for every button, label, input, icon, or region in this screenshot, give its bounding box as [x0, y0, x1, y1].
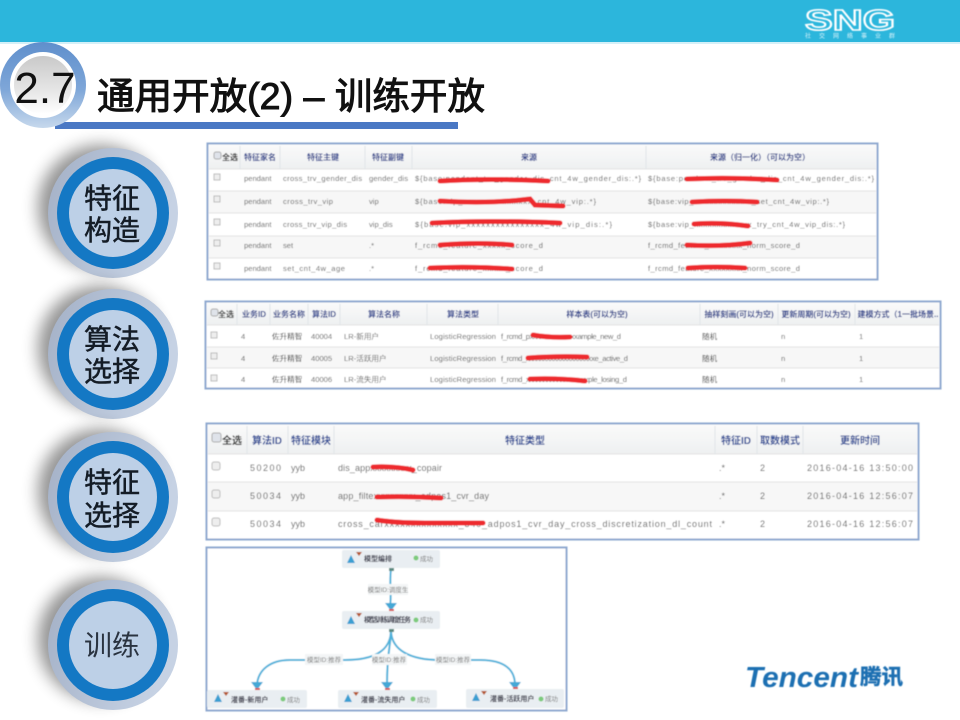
table: algorithm selection: 算法名称 — [368, 309, 400, 319]
title underline — [55, 122, 458, 129]
table: algorithm selection: 4 — [241, 375, 245, 384]
step: 特征构造 — [38, 145, 178, 278]
table: feature selection: 更新时间 — [840, 434, 880, 447]
table: algorithm selection: LR-活跃用户 — [344, 353, 387, 363]
table: algorithm selection: 业务ID — [242, 309, 266, 319]
table: algorithm selection: 佐升精智 — [272, 353, 302, 363]
table: feature construction: f_rcmd_feature_xxxxxxxx_norm_score_d — [648, 264, 800, 273]
table: algorithm selection: 佐升精智 — [272, 331, 302, 341]
step: 算法选择: 算法 — [84, 324, 140, 355]
node: active users: 成功 — [545, 694, 558, 703]
table: feature construction: .* — [369, 241, 374, 250]
table: algorithm selection: n — [781, 332, 785, 341]
logo: SNG: 社交网络事业群 — [805, 32, 895, 40]
table: algorithm selection: 40005 — [311, 354, 332, 363]
table: feature construction: 特征家名 — [244, 152, 276, 162]
table: algorithm selection: 抽样刻画(可以为空) — [704, 309, 774, 319]
table: algorithm selection: 更新周期(可以为空) — [781, 309, 851, 319]
step: 算法选择 — [38, 286, 178, 419]
table: feature construction: pendant — [244, 264, 272, 273]
table: feature selection: 特征类型 — [505, 434, 545, 447]
table: feature construction: pendant — [244, 174, 272, 183]
section number badge: 2.7 — [14, 64, 76, 113]
table: feature selection: app_filtexxxxxxxxx_adpos1_cvr_day — [338, 491, 490, 501]
table: feature construction: 来源（归一化）（可以为空） — [710, 152, 810, 162]
title: 通用开放(2) – 训练开放 — [97, 76, 485, 117]
node: lost users: 灌番-流失用户 — [361, 695, 405, 704]
table: feature selection: 2016-04-16 12:56:07 — [807, 491, 913, 501]
table: feature construction: set_cnt_4w_age — [283, 264, 345, 273]
table: feature selection: yyb — [291, 519, 305, 529]
table: feature selection: 50200 — [250, 463, 281, 473]
table: feature construction — [208, 144, 878, 280]
table: feature selection: 取数模式 — [760, 434, 800, 447]
table: feature selection: 2016-04-16 12:56:07 — [807, 519, 913, 529]
table: feature construction: f_rcmd_feature_xxxxx_score_d — [415, 241, 543, 250]
logo: SNG: SNG — [805, 5, 895, 37]
node: model orchestration — [342, 550, 440, 571]
table: feature construction: ${base:vip_xxxxxxxxxxxxxxxx_4w_vip_dis:.*} — [415, 220, 612, 229]
node: new users — [207, 688, 307, 708]
edge labels — [305, 584, 471, 665]
node: model training — [342, 609, 440, 632]
table: feature construction: set — [283, 241, 294, 250]
table: algorithm selection: LogisticRegression — [430, 332, 496, 341]
table: algorithm selection: 1 — [859, 354, 863, 363]
node: new users: 成功 — [287, 695, 300, 704]
edge labels: 模型ID:调度生 — [368, 585, 409, 594]
table: algorithm selection — [206, 302, 940, 388]
table: algorithm selection: LR-新用户 — [344, 331, 379, 341]
table: feature construction: f_rcmd_feature_xxxxxxxx_norm_score_d — [648, 241, 800, 250]
table: feature selection — [206, 424, 918, 540]
table: algorithm selection: 4 — [241, 332, 245, 341]
table: algorithm selection: f_rcmd_xxxxxxxxxxxxxxxxxxple_losing_d — [501, 375, 627, 384]
table: algorithm selection: 随机 — [702, 353, 718, 363]
step: 算法选择: 选择 — [84, 356, 140, 387]
table: feature selection: 2016-04-16 13:50:00 — [807, 463, 913, 473]
table: feature construction: 特征主键 — [307, 152, 339, 162]
table: feature construction: ${base:pendant_trv_gender_dis_cnt_4w_gender_dis:.*} — [415, 174, 641, 183]
table: algorithm selection: 算法ID — [312, 309, 336, 319]
table: algorithm selection: f_rcmd_xxxxxxxxxxxxxxxxxxxxe_active_d — [501, 354, 628, 363]
table: algorithm selection: f_rcmd_pxxxxxxxxxxxxxxample_new_d — [501, 332, 621, 341]
table: feature construction: gender_dis — [369, 174, 408, 183]
edge labels: 模型ID:推荐 — [372, 655, 407, 664]
step: 特征选择: 选择 — [84, 500, 140, 531]
table: feature selection: 50034 — [250, 519, 281, 529]
table: feature construction: 全选 — [222, 152, 238, 162]
table: algorithm selection: LogisticRegression — [430, 375, 496, 384]
table: feature construction: 来源 — [521, 152, 537, 162]
flow arrows — [251, 569, 521, 690]
table: algorithm selection: 1 — [859, 375, 863, 384]
step: 特征选择: 特征 — [84, 467, 140, 498]
table: feature selection: 2 — [760, 519, 765, 529]
table: feature construction: cross_trv_vip_dis — [283, 220, 347, 229]
table: feature construction: vip_dis — [369, 220, 393, 229]
table: feature construction: pendant — [244, 241, 272, 250]
table: algorithm selection: 业务名称 — [273, 309, 305, 319]
node: model training: 成功 — [420, 615, 434, 624]
step: 训练: 训练 — [84, 630, 140, 661]
node: lost users — [338, 688, 437, 708]
table: feature construction: pendant — [244, 220, 272, 229]
table: algorithm selection: 随机 — [702, 374, 718, 384]
table: feature selection: 算法ID — [252, 434, 282, 447]
table: algorithm selection: 佐升精智 — [272, 374, 302, 384]
table: algorithm selection: LR-流失用户 — [344, 374, 387, 384]
table: feature construction: ${base:vip_xxxxxxxxxxxxx_try_cnt_4w_vip_dis:.*} — [648, 220, 845, 229]
table: algorithm selection: 40004 — [311, 332, 332, 341]
node: model orchestration: 模型编排 — [364, 554, 392, 563]
table: feature construction: cross_trv_vip — [283, 197, 333, 206]
node: active users — [466, 687, 564, 708]
table: feature construction: 特征副键 — [372, 152, 404, 162]
node: model orchestration: 成功 — [420, 554, 434, 563]
table: feature selection: cross_carxxxxxxxxxxxxxx_540_adpos1_cvr_day_cross_discretization_dl_count — [338, 519, 712, 529]
table: feature selection: 2 — [760, 491, 765, 501]
table: algorithm selection: 样本表(可以为空) — [566, 309, 628, 319]
table: algorithm selection: 4 — [241, 354, 245, 363]
step: 特征构造: 特征 — [84, 183, 140, 214]
table: algorithm selection: 40006 — [311, 375, 332, 384]
logo: Tencent: Tencent — [745, 662, 859, 694]
table: algorithm selection: 算法类型 — [447, 309, 479, 319]
table: feature construction: vip — [369, 197, 379, 206]
table: feature selection: .* — [719, 491, 726, 501]
table: feature selection: 50034 — [250, 491, 281, 501]
table: algorithm selection: LogisticRegression — [430, 354, 496, 363]
table: feature selection: 全选 — [222, 434, 242, 447]
table: feature selection: .* — [719, 519, 726, 529]
table: algorithm selection: 随机 — [702, 331, 718, 341]
table: algorithm selection: 全选 — [218, 309, 234, 319]
table: feature selection: .* — [719, 463, 726, 473]
table: algorithm selection: 建模方式（1一批场景.. — [858, 309, 938, 319]
table: feature construction: .* — [369, 264, 374, 273]
table: feature construction: ${base:vip_xxxxxxxxxxxxxxx_cnt_4w_vip:.*} — [415, 197, 596, 206]
logo: Tencent — [745, 662, 903, 694]
node: active users: 灌番-活跃用户 — [490, 694, 534, 703]
table: algorithm selection: n — [781, 375, 785, 384]
table: feature construction: cross_trv_gender_dis — [283, 174, 362, 183]
step: 特征构造: 构造 — [84, 215, 140, 246]
table: feature selection: yyb — [291, 463, 305, 473]
step: 训练 — [38, 577, 178, 710]
table: feature construction: ${base:vip_xxxxxxxxxxxxx_set_cnt_4w_vip:.*} — [648, 197, 829, 206]
table: feature selection: dis_appxxxxxxxxx_copair — [338, 463, 442, 473]
header band — [0, 0, 960, 44]
table: feature selection: yyb — [291, 491, 305, 501]
table: algorithm selection: n — [781, 354, 785, 363]
training flow diagram — [206, 548, 566, 710]
table: feature construction: ${base:pendant_trv_gender_dis_cnt_4w_gender_dis:.*} — [648, 174, 874, 183]
table: feature selection: 特征模块 — [291, 434, 331, 447]
step: 特征选择 — [38, 429, 178, 562]
edge labels: 模型ID:推荐 — [307, 655, 342, 664]
table: feature construction: f_rcmd_feature_xxxxx_score_d — [415, 264, 543, 273]
logo: Tencent: 腾讯 — [860, 666, 903, 689]
table: feature selection: 特征ID — [721, 434, 751, 447]
node: new users: 灌番-新用户 — [231, 695, 268, 704]
node: model training: 模型训练调度任务 — [364, 615, 411, 624]
logo: SNG — [805, 5, 895, 40]
edge labels: 模型ID:推荐 — [436, 655, 471, 664]
section number badge — [0, 42, 86, 128]
table: feature selection: 2 — [760, 463, 765, 473]
table: algorithm selection: 1 — [859, 332, 863, 341]
table: feature construction: pendant — [244, 197, 272, 206]
node: lost users: 成功 — [417, 695, 430, 704]
